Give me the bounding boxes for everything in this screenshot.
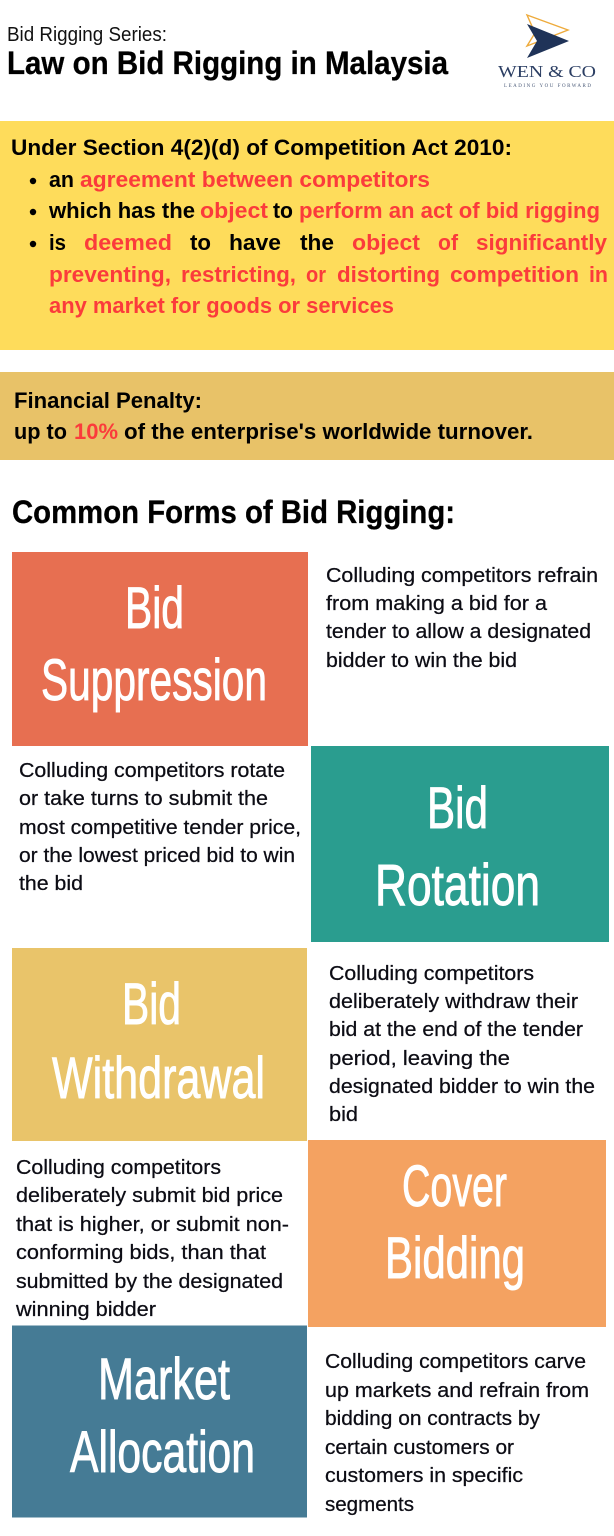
panel: financial penalty: up to (14, 419, 67, 444)
description: market allocation: Colluding competitors carve (325, 1351, 586, 1373)
description: cover bidding: deliberately submit bid price (16, 1185, 283, 1207)
card: cover bidding (308, 1140, 606, 1327)
description: bid suppression (326, 565, 598, 672)
card: bid withdrawal (12, 948, 307, 1141)
description: bid withdrawal: deliberately withdraw their (329, 991, 578, 1013)
description: bid suppression: Colluding competitors refrain (326, 565, 598, 587)
description: bid rotation: the bid (19, 873, 83, 895)
description: bid withdrawal: designated bidder to win the (329, 1076, 595, 1098)
description: bid rotation: or take turns to submit the (19, 788, 268, 810)
card: bid withdrawal: Withdrawal (52, 1046, 265, 1111)
bullet 2: which has the (48, 198, 195, 223)
card: market allocation (12, 1326, 307, 1518)
panel heading: Under Section 4(2)(d) of Competition Act 2010: (11, 135, 512, 160)
description: bid suppression: bidder to win the bid (326, 650, 517, 672)
panel: Section 4(2)(d) (0, 121, 614, 350)
bullet 3: any market for goods or services (49, 293, 394, 318)
description: bid withdrawal: bid at the end of the tender (329, 1019, 583, 1041)
card: bid rotation: Bid (427, 776, 488, 841)
bullet 3: deemed (84, 230, 172, 255)
description: bid rotation: or the lowest priced bid to win (19, 845, 295, 867)
logo: Wen & Co: LEADING YOU FORWARD (504, 84, 591, 89)
card: market allocation: Market (98, 1347, 230, 1412)
bullet 3 (30, 230, 608, 318)
description: cover bidding: submitted by the designated (16, 1271, 283, 1293)
card: bid suppression: Bid (125, 576, 184, 641)
panel: financial penalty: 10% (74, 419, 118, 444)
bullet 3: the (300, 230, 334, 255)
card: cover bidding: Cover (402, 1154, 507, 1219)
header (7, 24, 448, 81)
bullet 2: object (200, 198, 269, 223)
bullet 3: distorting (337, 262, 440, 287)
panel: financial penalty: Financial Penalty: (14, 388, 202, 413)
bullet 3: or (306, 262, 326, 287)
description: bid withdrawal: Colluding competitors (329, 963, 534, 985)
description: bid rotation (19, 760, 301, 895)
description: bid withdrawal (329, 963, 595, 1126)
description: market allocation: bidding on contracts by (325, 1408, 540, 1430)
bullet 3: in (589, 262, 608, 287)
description: bid withdrawal: period, leaving the (329, 1048, 510, 1070)
description: bid rotation: most competitive tender price, (19, 817, 301, 839)
description: market allocation: up markets and refrain from (325, 1380, 589, 1402)
heading: common forms: Common Forms of Bid Rigging: (12, 494, 455, 530)
description: market allocation: customers in specific (325, 1465, 523, 1487)
card: cover bidding: Bidding (385, 1226, 525, 1291)
description: market allocation (325, 1351, 589, 1516)
bullet 3: object (352, 230, 421, 255)
description: bid rotation: Colluding competitors rotate (19, 760, 285, 782)
card: bid suppression (12, 552, 308, 746)
bullet 2: perform an act of bid rigging (299, 198, 600, 223)
card: bid withdrawal: Bid (122, 972, 181, 1037)
series label: Bid Rigging Series: (7, 24, 167, 46)
bullet 1: agreement between competitors (80, 167, 430, 192)
bullet 3: is (49, 230, 66, 255)
logo: Wen & Co: WEN & CO (498, 62, 596, 81)
description: bid suppression: tender to allow a designated (326, 621, 591, 643)
panel: financial penalty: of the enterprise's worldwide turnover. (124, 419, 533, 444)
description: cover bidding: conforming bids, than that (16, 1242, 266, 1264)
bullet 2: to (273, 198, 293, 223)
logo: Wen & Co (498, 15, 596, 89)
description: cover bidding: Colluding competitors (16, 1157, 221, 1179)
card: market allocation: Allocation (70, 1420, 255, 1485)
bullet 3: competition (450, 262, 579, 287)
description: bid suppression: from making a bid for a (326, 593, 548, 615)
card: bid rotation (311, 746, 609, 942)
description: cover bidding: that is higher, or submit non- (16, 1214, 289, 1236)
title: Law on Bid Rigging in Malaysia (7, 45, 448, 81)
description: bid withdrawal: bid (329, 1104, 358, 1126)
bullet 3: restricting, (181, 262, 296, 287)
card: bid rotation: Rotation (375, 853, 540, 918)
description: market allocation: certain customers or (325, 1437, 514, 1459)
card: bid suppression: Suppression (41, 648, 267, 713)
panel: financial penalty (0, 372, 614, 460)
bullet 3: significantly (476, 230, 608, 255)
description: cover bidding (15, 1157, 289, 1321)
bullet 3: to (190, 230, 211, 255)
bullet 1: an (49, 167, 74, 192)
bullet 3: of (438, 230, 459, 255)
description: cover bidding: winning bidder (15, 1299, 156, 1321)
bullet 3: preventing, (49, 262, 171, 287)
bullet 2 (30, 198, 600, 223)
description: market allocation: segments (325, 1494, 414, 1516)
bullet 3: have (229, 230, 281, 255)
